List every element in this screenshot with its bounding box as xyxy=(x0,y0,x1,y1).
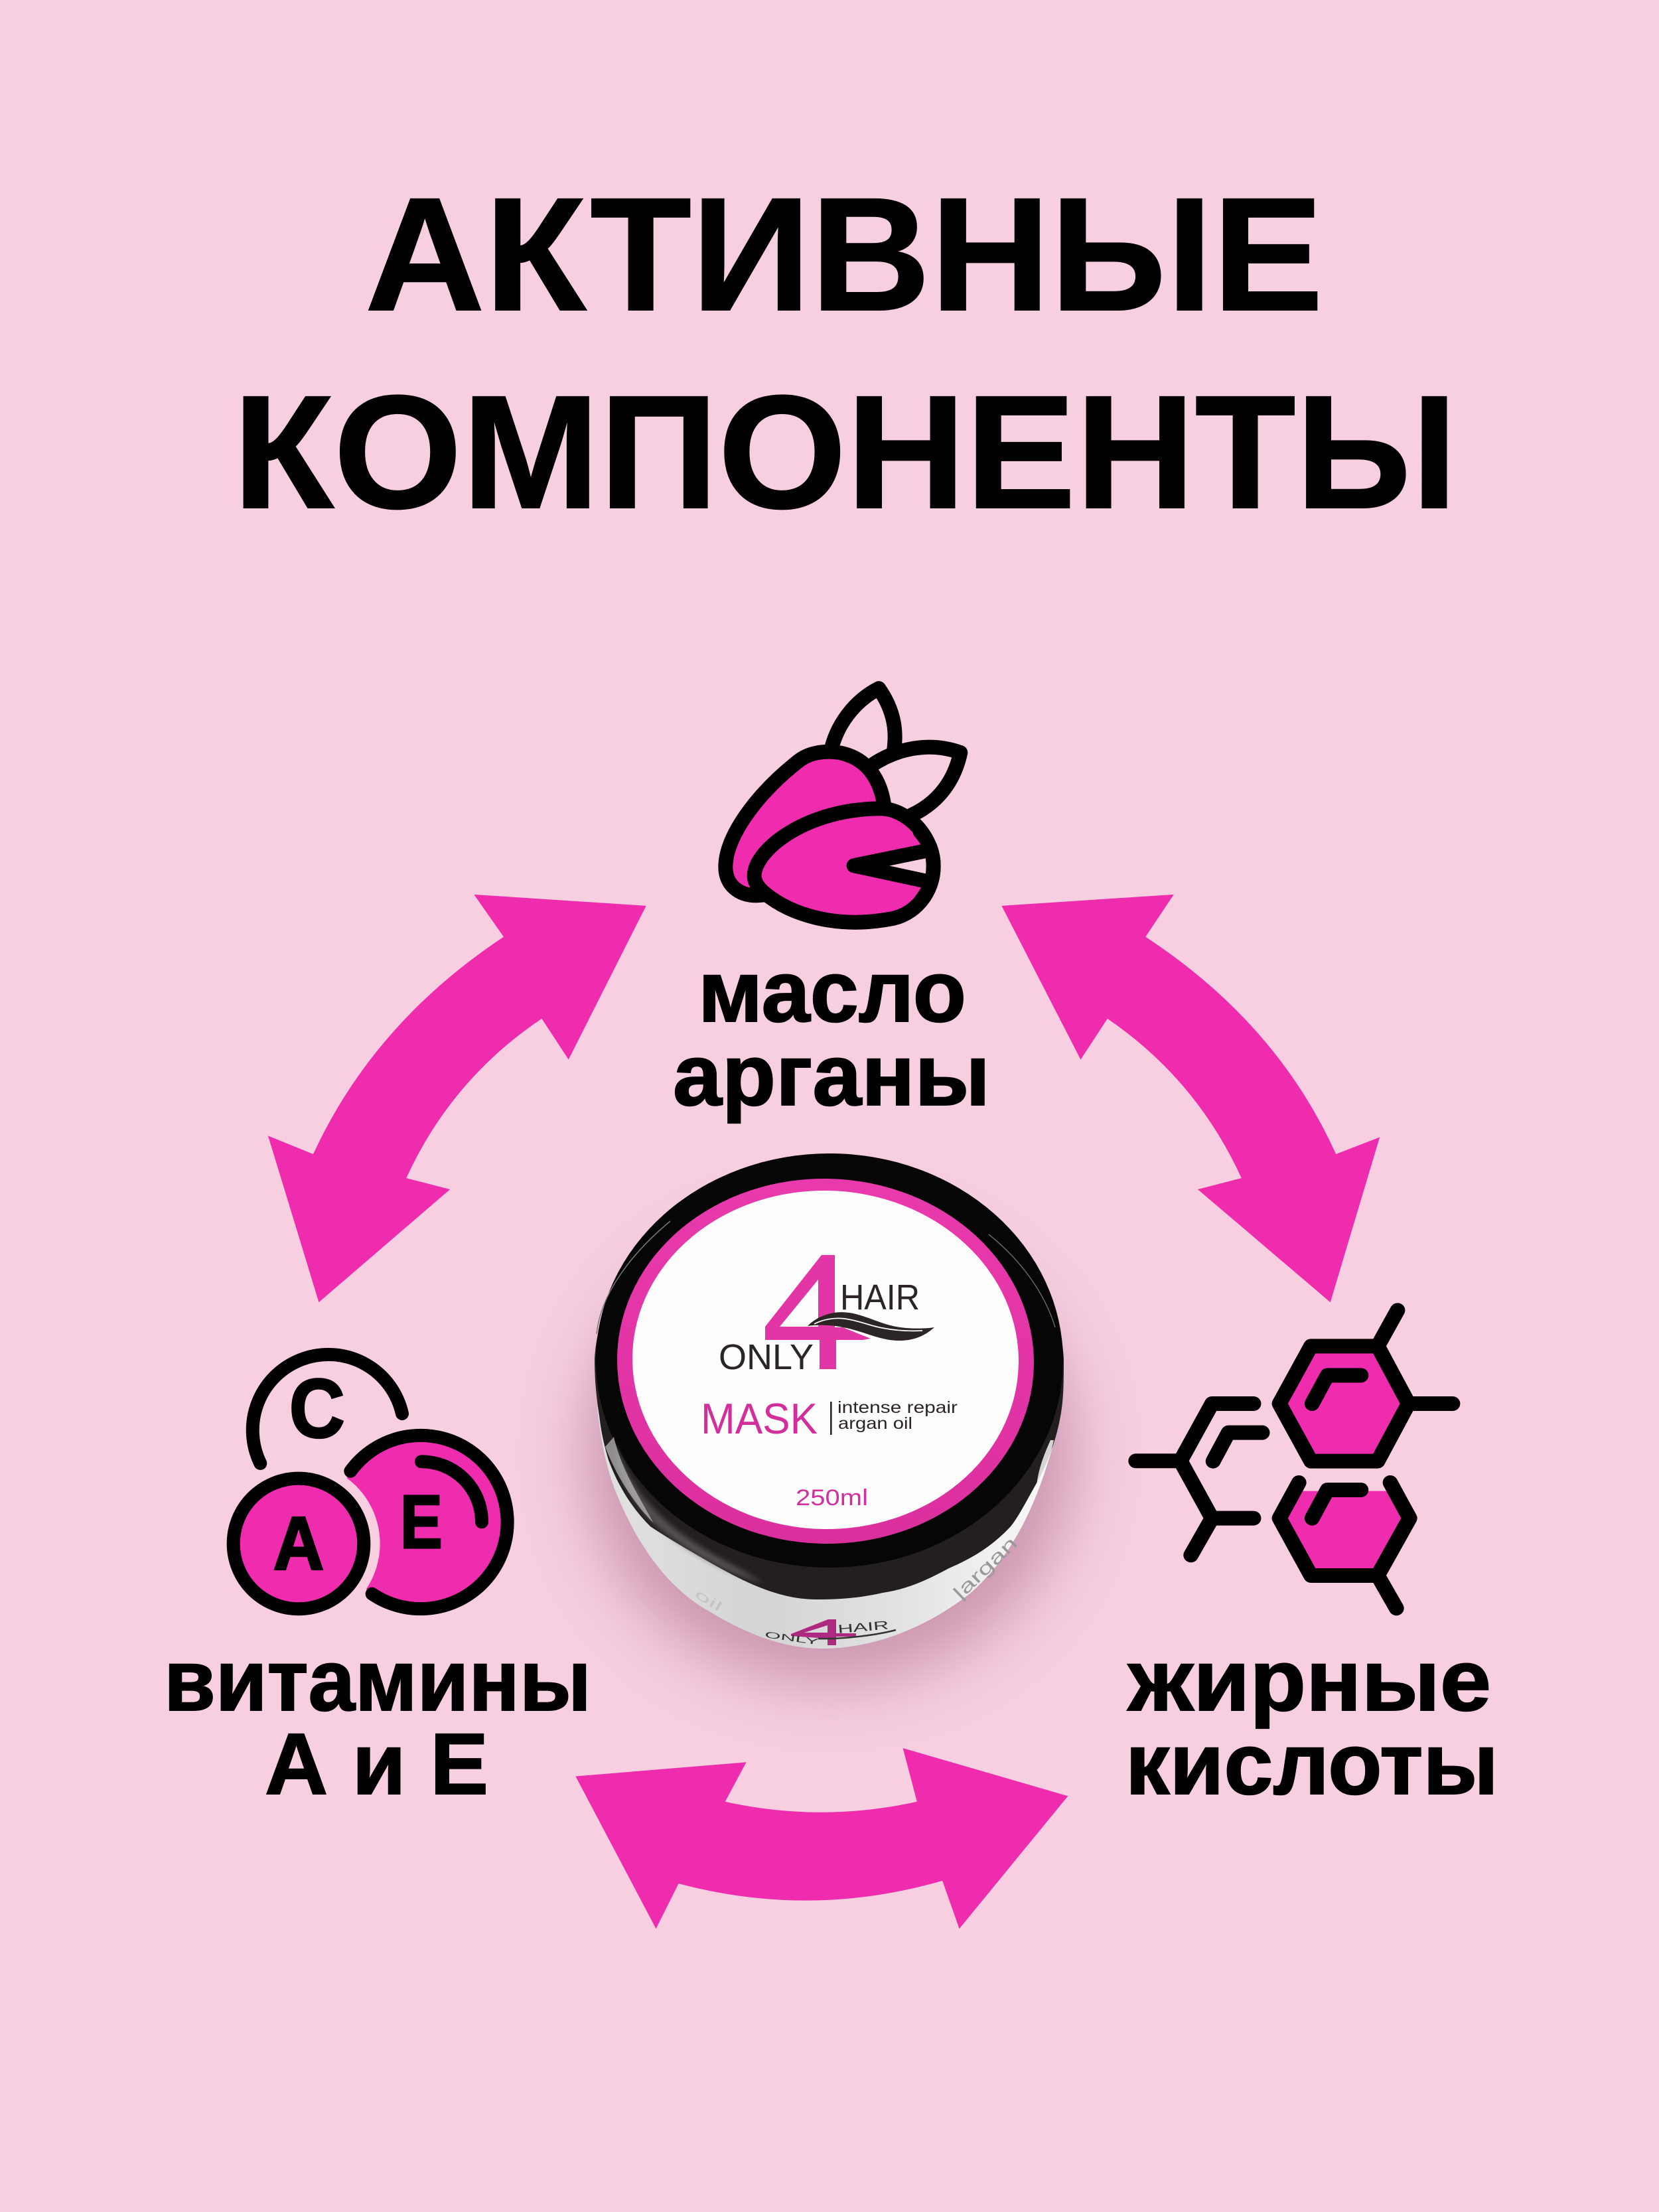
label: fatty acids: жирные xyxy=(1127,1631,1491,1729)
label: argan oil xyxy=(673,942,990,1124)
label: argan oil: масло xyxy=(698,942,966,1040)
jar side logo: HAIR xyxy=(837,1618,889,1636)
icon: vitamins A C E: E xyxy=(400,1480,443,1564)
icon: fatty acid molecules xyxy=(1136,1310,1453,1608)
label: argan oil: арганы xyxy=(673,1026,990,1124)
jar product text: 250ml xyxy=(796,1485,868,1511)
jar side text xyxy=(691,1532,1021,1615)
jar logo: HAIR xyxy=(840,1278,920,1317)
label: fatty acids: кислоты xyxy=(1125,1715,1498,1812)
title: КОМПОНЕНТЫ xyxy=(233,362,1457,542)
jar logo: ONLY xyxy=(719,1337,814,1377)
jar side logo: ONLY xyxy=(764,1629,820,1647)
arrow: argan to fatty acids xyxy=(1001,895,1380,1302)
arrow: argan to vitamins xyxy=(268,895,646,1302)
label: vitamins xyxy=(164,1631,591,1812)
icon: argan nut with leaves xyxy=(725,688,960,922)
icon: vitamins A C E: A xyxy=(273,1502,324,1586)
title: АКТИВНЫЕ xyxy=(365,165,1323,344)
label: vitamins: А и Е xyxy=(265,1715,488,1812)
arrows cycle xyxy=(268,895,1380,1929)
product jar xyxy=(587,1153,1072,1682)
jar logo xyxy=(719,1255,934,1377)
jar side text: oil xyxy=(691,1587,725,1615)
jar product text: MASK xyxy=(701,1394,818,1443)
title xyxy=(233,165,1457,542)
label: fatty acids xyxy=(1125,1631,1498,1812)
icon: vitamins A C E: C xyxy=(289,1363,344,1455)
label: vitamins: витамины xyxy=(164,1631,591,1729)
jar side logo xyxy=(764,1618,896,1647)
jar product text: intense repair xyxy=(837,1398,958,1417)
jar side text: |argan xyxy=(949,1532,1021,1603)
arrow: vitamins to fatty acids xyxy=(575,1748,1068,1929)
jar product text: argan oil xyxy=(838,1414,912,1433)
jar product text xyxy=(701,1394,958,1511)
icon: vitamins A C E xyxy=(217,1355,508,1625)
